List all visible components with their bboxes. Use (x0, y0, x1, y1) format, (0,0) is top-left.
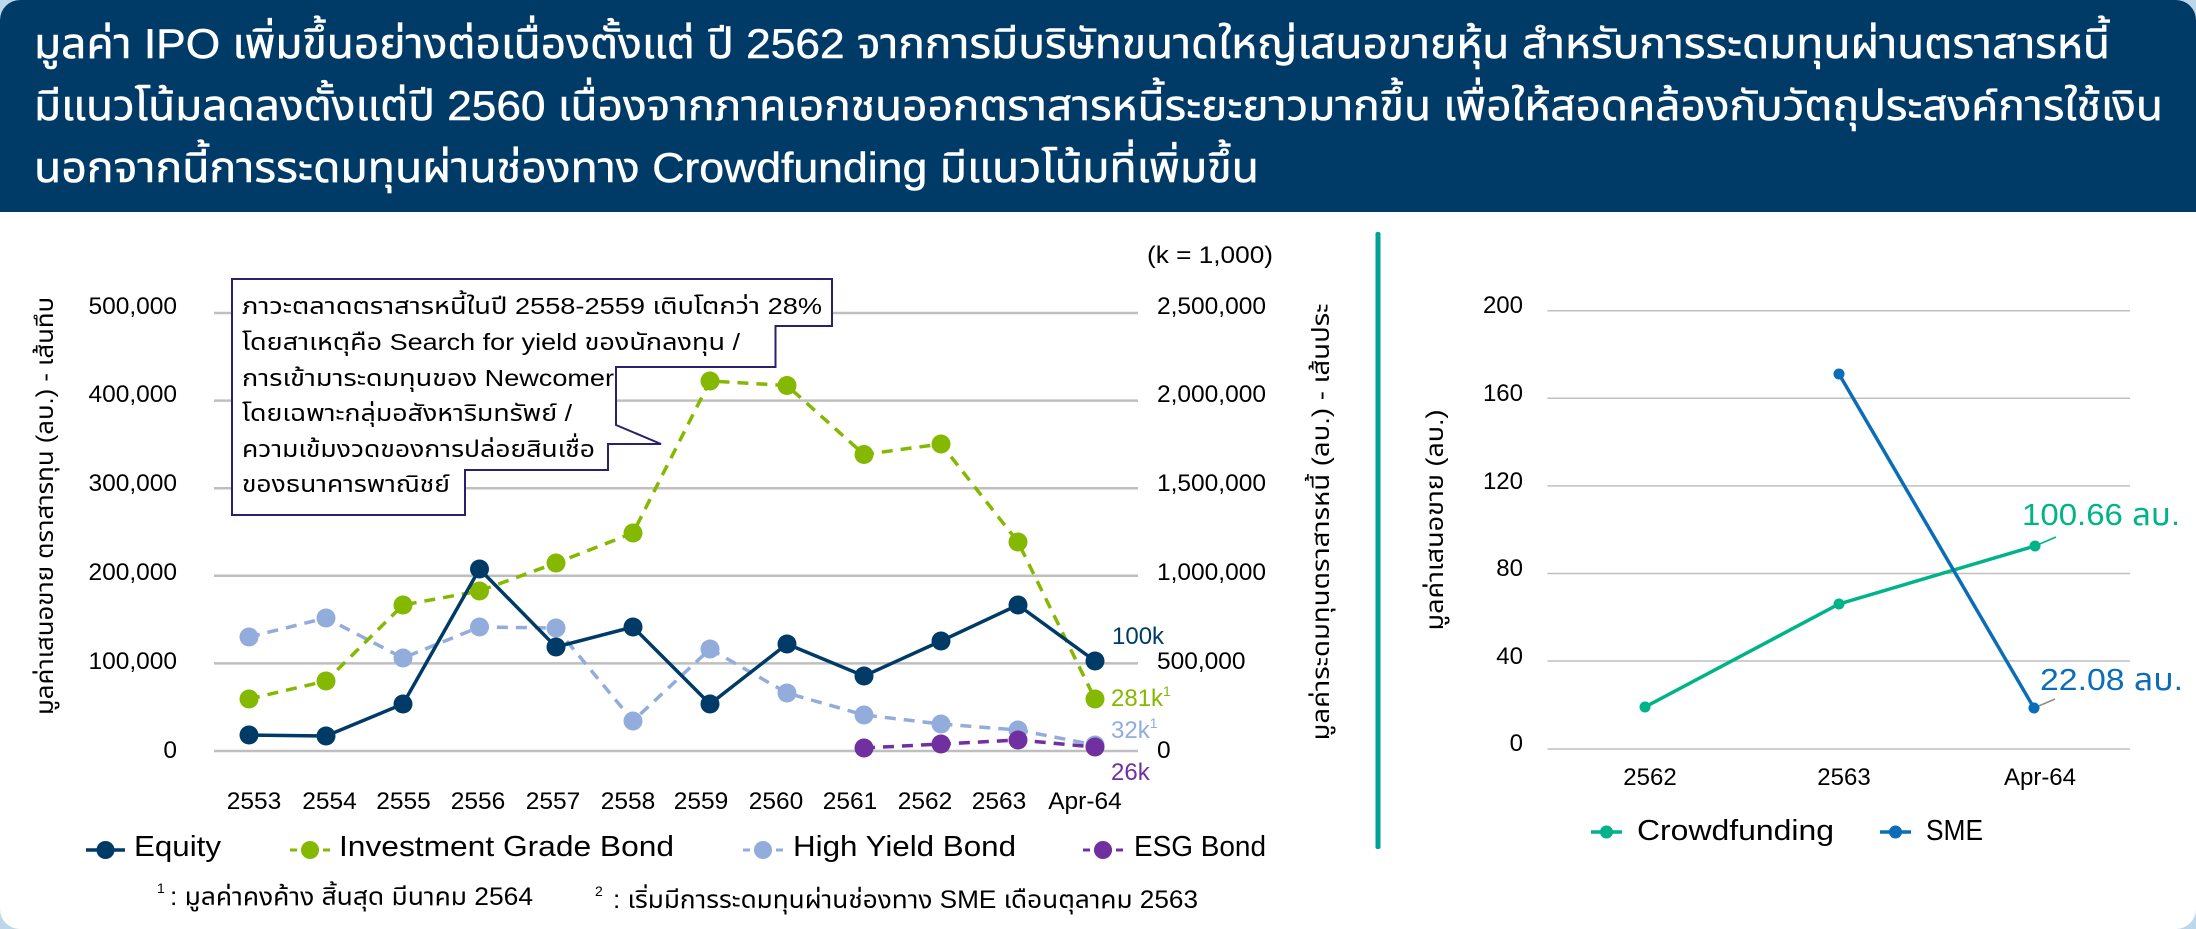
right axis values: 500,000 (1157, 648, 1246, 675)
callout: bond market growth: โดยสาเหตุคือ Search for yield ของนักลงทุน / (242, 329, 741, 356)
right y-axis title: มูลค่าระดมทุนตราสารหนี้ (ลบ.) - เส้นประ (1304, 303, 1336, 741)
title banner: นอกจากนี้การระดมทุนผ่านช่องทาง Crowdfunding มีแนวโน้มที่เพิ่มขึ้น (34, 139, 1259, 193)
left axis values: 300,000 (88, 470, 177, 497)
left axis values: 0 (163, 737, 177, 764)
year labels: 2559 (674, 788, 728, 815)
legend item: crowdfunding: Crowdfunding (1637, 815, 1834, 847)
right chart axis values: 200 (1483, 292, 1523, 319)
right axis values (1157, 293, 1266, 764)
title banner (0, 0, 2196, 212)
year labels: 2560 (749, 788, 803, 815)
left axis values: 200,000 (88, 559, 177, 586)
right chart y-axis title: มูลค่าเสนอขาย (ลบ.) (1421, 410, 1450, 630)
year labels: 2555 (376, 788, 431, 815)
right chart axis values: 120 (1483, 468, 1523, 495)
footnote 1: 1 (157, 880, 165, 896)
right chart axis values: 0 (1510, 730, 1523, 757)
year labels (227, 788, 1122, 815)
callout: bond market growth: โดยเฉพาะกลุ่มอสังหาริมทรัพย์ / (242, 400, 573, 427)
end-of-series data labels: 281k (1111, 685, 1163, 712)
right chart axis values: 40 (1496, 643, 1523, 670)
series: investment grade bond (240, 372, 1104, 708)
legend: left chart (86, 831, 1266, 863)
footnote 1: : มูลค่าคงค้าง สิ้นสุด มีนาคม 2564 (170, 880, 533, 912)
legend: right chart (1591, 815, 1983, 847)
right axis values: 2,500,000 (1157, 293, 1266, 320)
data label: crowdfunding: 100.66 ลบ. (2022, 497, 2180, 532)
right chart year labels: Apr-64 (2004, 764, 2076, 791)
year labels: 2557 (526, 788, 580, 815)
unit note: (k = 1,000) (1147, 242, 1273, 269)
callout: bond market growth (232, 279, 832, 515)
left chart gridlines (214, 313, 1138, 751)
right axis values: 1,500,000 (1157, 470, 1266, 497)
right axis values: 1,000,000 (1157, 559, 1266, 586)
left axis values: 100,000 (88, 648, 177, 675)
legend item: high yield bond: High Yield Bond (793, 831, 1016, 863)
year labels: 2563 (972, 788, 1026, 815)
legend item: ESG bond: ESG Bond (1134, 831, 1266, 863)
footnote 2: : เริ่มมีการระดมทุนผ่านช่องทาง SME เดือนตุลาคม 2563 (613, 883, 1198, 915)
year labels: 2558 (601, 788, 655, 815)
divider (1376, 232, 1380, 849)
legend item: investment grade bond: Investment Grade Bond (339, 831, 674, 863)
right chart year labels (1623, 764, 2076, 791)
right chart axis values (1483, 292, 1523, 757)
title banner: มูลค่า IPO เพิ่มขึ้นอย่างต่อเนื่องตั้งแต่ ปี 2562 จากการมีบริษัทขนาดใหญ่เสนอขายหุ้น สำหรับการระดมทุนผ่านตราสารหนี้ (34, 15, 2110, 69)
legend item: SME (1880, 815, 1983, 847)
end-of-series data labels: 26k (1111, 759, 1151, 786)
footnote 2: 2 (595, 883, 603, 899)
year labels: 2556 (451, 788, 505, 815)
data label: SME: 22.08 ลบ. (2040, 662, 2183, 697)
left axis values (88, 293, 177, 764)
series: equity (240, 560, 1104, 746)
year labels: Apr-64 (1048, 788, 1122, 815)
year labels: 2561 (823, 788, 877, 815)
right axis values: 0 (1157, 737, 1171, 764)
callout: bond market growth: การเข้ามาระดมทุนของ Newcomer (242, 365, 614, 392)
right chart year labels: 2562 (1623, 764, 1677, 791)
left axis values: 500,000 (88, 293, 177, 320)
series: crowdfunding (1640, 537, 2056, 712)
year labels: 2553 (227, 788, 281, 815)
end-of-series data labels: 32k (1111, 717, 1150, 744)
series: high yield bond (240, 608, 1104, 754)
end-of-series data labels: 1 (1150, 715, 1158, 731)
series: SME (1834, 368, 2055, 714)
left y-axis title: มูลค่าเสนอขาย ตราสารทุน (ลบ.) - เส้นทึบ (31, 297, 60, 715)
callout: bond market growth: ภาวะตลาดตราสารหนี้ในปี 2558-2559 เติบโตกว่า 28% (242, 290, 822, 319)
series: ESG bond (854, 730, 1104, 758)
right chart axis values: 160 (1483, 380, 1523, 407)
year labels: 2562 (898, 788, 952, 815)
callout: bond market growth: ความเข้มงวดของการปล่อยสินเชื่อ (242, 433, 595, 462)
legend item: SME: SME (1926, 815, 1983, 847)
legend item: equity (86, 831, 222, 863)
end-of-series data labels: 100k (1112, 623, 1165, 650)
right axis values: 2,000,000 (1157, 381, 1266, 408)
right chart gridlines (1548, 311, 2130, 749)
legend item: equity: Equity (134, 831, 222, 863)
left axis values: 400,000 (88, 381, 177, 408)
right chart axis values: 80 (1496, 555, 1523, 582)
end-of-series data labels: 1 (1163, 683, 1171, 699)
callout: bond market growth: ของธนาคารพาณิชย์ (242, 471, 450, 497)
title banner: มีแนวโน้มลดลงตั้งแต่ปี 2560 เนื่องจากภาคเอกชนออกตราสารหนี้ระยะยาวมากขึ้น เพื่อให้สอดคล้องกับวัตถุประสงค์การใช้เงิน (34, 77, 2163, 131)
right chart year labels: 2563 (1817, 764, 1871, 791)
left chart: equity and bond fundraising (88, 293, 1266, 815)
year labels: 2554 (302, 788, 357, 815)
end-of-series data labels (1111, 623, 1171, 786)
right chart: crowdfunding and SME (1483, 292, 2183, 791)
